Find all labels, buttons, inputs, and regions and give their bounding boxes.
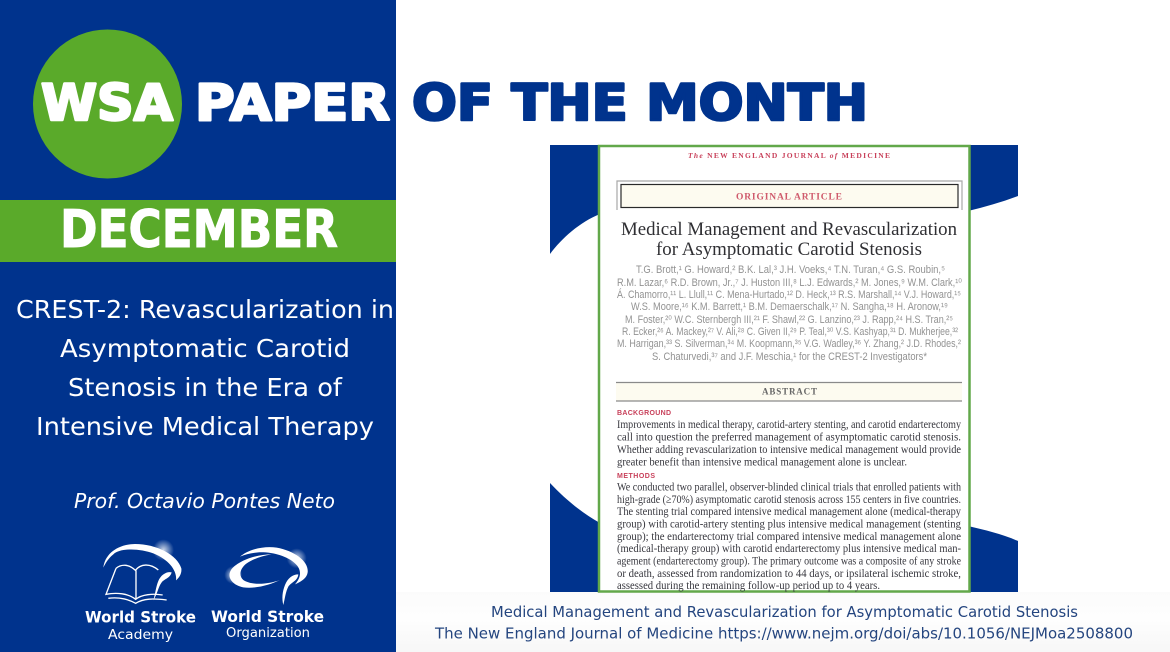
paper title text <box>16 295 394 441</box>
heading: WSA Paper of the Month: PAPER <box>195 74 390 132</box>
author list: R.M. Lazar,⁶ R.D. Brown, Jr.,⁷ J. Huston III,⁸ L.J. Edwards,² M. Jones,⁹ W.M. Clark,¹⁰ <box>617 277 963 289</box>
logo wordmark: World Stroke Organization: World Stroke <box>211 607 324 626</box>
original article box <box>617 181 962 210</box>
logo wordmark: World Stroke Organization: Organization <box>226 625 310 641</box>
methods body text <box>617 480 961 592</box>
logo: World Stroke Organization <box>211 547 324 641</box>
article type label: ORIGINAL ARTICLE <box>736 192 842 202</box>
methods body text: (medical-therapy group) with carotid endarterectomy plus intensive medical man- <box>617 541 961 555</box>
background body text: greater benefit than intensive medical management alone is unclear. <box>617 454 907 468</box>
paper title text: CREST-2: Revascularization in <box>16 295 394 324</box>
author list: M. Foster,²⁰ W.C. Sternbergh III,²¹ F. Shawl,²² G. Lanzino,²³ J. Rapp,²⁴ H.S. Tran,²⁵ <box>625 314 953 326</box>
background body text: call into question the preferred management of asymptomatic carotid stenosis. <box>617 430 961 444</box>
methods body text: We conducted two parallel, observer-blinded clinical trials that enrolled patients with <box>617 480 961 494</box>
heading: WSA Paper of the Month: WSA <box>41 74 173 132</box>
author name: Prof. Octavio Pontes Neto <box>74 489 335 513</box>
methods section <box>617 473 961 592</box>
background section <box>617 410 961 468</box>
background body text: Improvements in medical therapy, carotid-artery stenting, and carotid endarterectomy <box>617 417 961 431</box>
methods body text: group); the endarterectomy trial compared intensive medical management alone <box>617 529 961 543</box>
article title: for Asymptomatic Carotid Stenosis <box>656 240 922 260</box>
author list: T.G. Brott,¹ G. Howard,² B.K. Lal,³ J.H. Voeks,⁴ T.N. Turan,⁴ G.S. Roubin,⁵ <box>636 264 945 276</box>
decorative blue shapes behind paper <box>550 145 1018 592</box>
paper title text: Intensive Medical Therapy <box>36 412 374 441</box>
month label: DECEMBER <box>60 200 338 260</box>
article title <box>621 220 957 260</box>
methods body text: high-grade (≥70%) asymptomatic carotid stenosis across 155 centers in five countries. <box>617 492 961 506</box>
background body text: Whether adding revascularization to intensive medical management would provide <box>617 442 961 456</box>
paper title text: Stenosis in the Era of <box>68 373 343 402</box>
author list: W.S. Moore,¹⁶ K.M. Barrett,¹ B.M. Demaerschalk,¹⁷ N. Sangha,¹⁸ H. Aronow,¹⁹ <box>631 301 948 313</box>
paper title text: Asymptomatic Carotid <box>60 334 350 363</box>
abstract label: ABSTRACT <box>762 386 817 396</box>
author list <box>617 264 963 363</box>
logo: World Stroke Academy <box>85 539 196 643</box>
heading: WSA Paper of the Month: OF THE MONTH <box>412 74 868 132</box>
panel: journal article page <box>599 146 970 592</box>
green circle badge <box>33 30 182 178</box>
month banner <box>0 200 396 262</box>
logo wordmark: World Stroke Academy <box>85 608 196 643</box>
author list: Á. Chamorro,¹¹ L. Llull,¹¹ C. Mena-Hurtado,¹² D. Heck,¹³ R.S. Marshall,¹⁴ V.J. Howard,¹⁵ <box>617 288 961 301</box>
heading: WSA Paper of the Month <box>41 74 868 132</box>
methods body text: group) with carotid-artery stenting plus intensive medical management (stenting <box>617 516 961 530</box>
author list: S. Chaturvedi,³⁷ and J.F. Meschia,¹ for the CREST-2 Investigators* <box>652 351 927 363</box>
citation caption: Medical Management and Revascularization for Asymptomatic Carotid Stenosis <box>491 603 1078 621</box>
citation caption: The New England Journal of Medicine https://www.nejm.org/doi/abs/10.1056/NEJMoa2508800 <box>434 624 1133 642</box>
author list: R. Ecker,²⁶ A. Mackey,²⁷ V. Ali,²⁸ C. Given II,²⁹ P. Teal,³⁰ V.S. Kashyap,³¹ D. Mukherjee,³² <box>622 326 958 338</box>
methods body text: The stenting trial compared intensive medical management alone (medical-therapy <box>617 504 961 518</box>
methods body text: assessed during the remaining follow-up period up to 4 years. <box>617 578 880 592</box>
article title: Medical Management and Revascularization <box>621 220 957 240</box>
methods body text: or death, assessed from randomization to 44 days, or ipsilateral ischemic stroke, <box>617 566 961 580</box>
abstract header <box>616 382 962 401</box>
background section: BACKGROUND <box>617 410 671 417</box>
logo wordmark: World Stroke Organization <box>211 607 324 641</box>
methods section: METHODS <box>617 473 655 480</box>
citation caption <box>434 603 1133 642</box>
background body text <box>617 417 961 468</box>
journal name: The NEW ENGLAND JOURNAL of MEDICINE <box>688 151 890 160</box>
panel: left sidebar <box>0 0 396 652</box>
logo wordmark: World Stroke Academy: World Stroke <box>85 608 196 626</box>
logo wordmark: World Stroke Academy: Academy <box>108 627 173 643</box>
methods body text: agement (endarterectomy group). The primary outcome was a composite of any stroke <box>617 554 961 568</box>
author list: M. Harrigan,³³ S. Silverman,³⁴ M. Koopmann,³⁵ V.G. Wadley,³⁶ Y. Zhang,² J.D. Rhodes,² <box>617 338 961 350</box>
